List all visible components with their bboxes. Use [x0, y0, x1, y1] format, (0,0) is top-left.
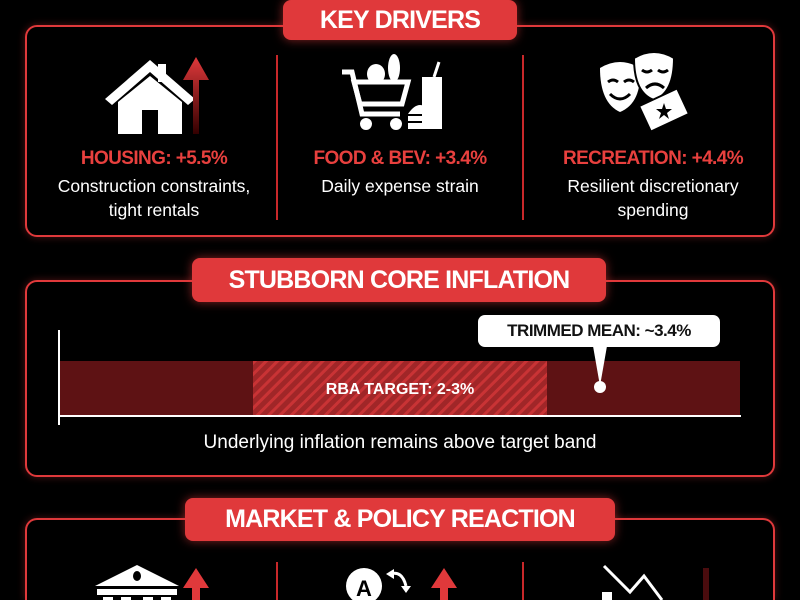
- heading: market & policy reaction: MARKET & POLICY REACTION: [225, 505, 575, 533]
- icon: house with arrow: [105, 57, 209, 134]
- text: spending: [617, 200, 689, 220]
- icon: bank with arrow: [95, 565, 209, 600]
- text: Construction constraints,: [58, 176, 250, 196]
- chart: inflation band: RBA TARGET: 2-3%: [326, 381, 474, 398]
- text: tight rentals: [109, 200, 199, 220]
- heading: market & policy reaction: [185, 498, 615, 541]
- icon: falling chart: [602, 565, 709, 600]
- callout: trimmed mean: TRIMMED MEAN: ~3.4%: [507, 321, 691, 340]
- text: Daily expense strain: [321, 176, 479, 196]
- icon: cart and food: [342, 54, 442, 130]
- heading: key drivers: KEY DRIVERS: [320, 6, 480, 34]
- icon: theatre masks and ticket: [600, 53, 688, 130]
- panel: market & policy reaction: [25, 518, 775, 600]
- panel: stubborn core inflation: [25, 280, 775, 477]
- chart: inflation band: [58, 330, 741, 425]
- heading: key drivers: [283, 0, 517, 40]
- panel: key drivers: [25, 25, 775, 237]
- driver: recreation: RECREATION: +4.4%: [563, 148, 743, 169]
- text: caption: Underlying inflation remains above target band: [204, 432, 596, 453]
- driver: food: FOOD & BEV: +3.4%: [314, 148, 486, 169]
- heading: stubborn core inflation: [192, 258, 606, 302]
- driver: housing: HOUSING: +5.5%: [81, 148, 227, 169]
- icon: currency exchange with arrow: [346, 568, 457, 600]
- heading: stubborn core inflation: STUBBORN CORE INFLATION: [229, 266, 569, 294]
- callout: trimmed mean: [478, 315, 720, 347]
- text: Resilient discretionary: [567, 176, 739, 196]
